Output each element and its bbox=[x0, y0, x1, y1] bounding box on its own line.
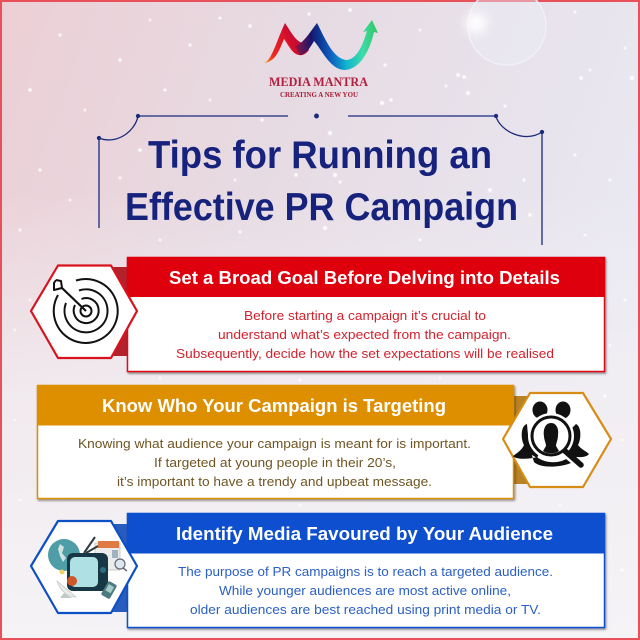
heading: Know Who Your Campaign is Targeting bbox=[102, 395, 446, 416]
body text bbox=[78, 437, 471, 489]
panel: identify media favoured bbox=[31, 513, 605, 628]
hexagon bbox=[503, 393, 611, 487]
hexagon fold shadow bbox=[513, 396, 535, 484]
card bbox=[37, 385, 514, 498]
logo tagline: CREATING A NEW YOU bbox=[280, 90, 359, 99]
panel: know who your campaign is targeting bbox=[37, 385, 611, 498]
card bbox=[127, 513, 605, 628]
body text: While younger audiences are most active online, bbox=[219, 584, 511, 598]
body text: Knowing what audience your campaign is meant for is important. bbox=[78, 437, 471, 451]
body text: If targeted at young people in their 20’s, bbox=[154, 456, 396, 470]
heading: Identify Media Favoured by Your Audience bbox=[176, 523, 553, 544]
title: Tips for Running an bbox=[148, 134, 492, 177]
logo wordmark: MEDIA MANTRA bbox=[269, 74, 369, 89]
body text: older audiences are best reached using print media or TV. bbox=[190, 603, 541, 617]
hexagon fold shadow bbox=[108, 267, 127, 356]
hexagon fold shadow bbox=[108, 524, 127, 612]
title bbox=[125, 134, 518, 229]
card bbox=[127, 257, 605, 372]
body text: The purpose of PR campaigns is to reach a targeted audience. bbox=[178, 565, 553, 579]
logo: Media Mantra bbox=[264, 20, 378, 99]
panel: set a broad goal bbox=[31, 257, 605, 372]
heading: Set a Broad Goal Before Delving into Details bbox=[169, 267, 560, 288]
body text bbox=[176, 309, 554, 361]
body text bbox=[178, 565, 553, 617]
title frame bbox=[98, 114, 544, 245]
icon: audience search bbox=[513, 402, 589, 467]
icon: target bbox=[54, 279, 118, 343]
body text: understand what’s expected from the campaign. bbox=[218, 328, 511, 342]
hexagon bbox=[31, 266, 137, 358]
body text: it’s important to have a trendy and upbeat message. bbox=[117, 475, 432, 489]
hexagon bbox=[31, 521, 137, 613]
body text: Before starting a campaign it’s crucial to bbox=[244, 309, 486, 323]
logo swoosh bbox=[264, 20, 378, 70]
body text: Subsequently, decide how the set expectations will be realised bbox=[176, 347, 554, 361]
title: Effective PR Campaign bbox=[125, 186, 518, 229]
icon: media devices bbox=[48, 537, 127, 599]
